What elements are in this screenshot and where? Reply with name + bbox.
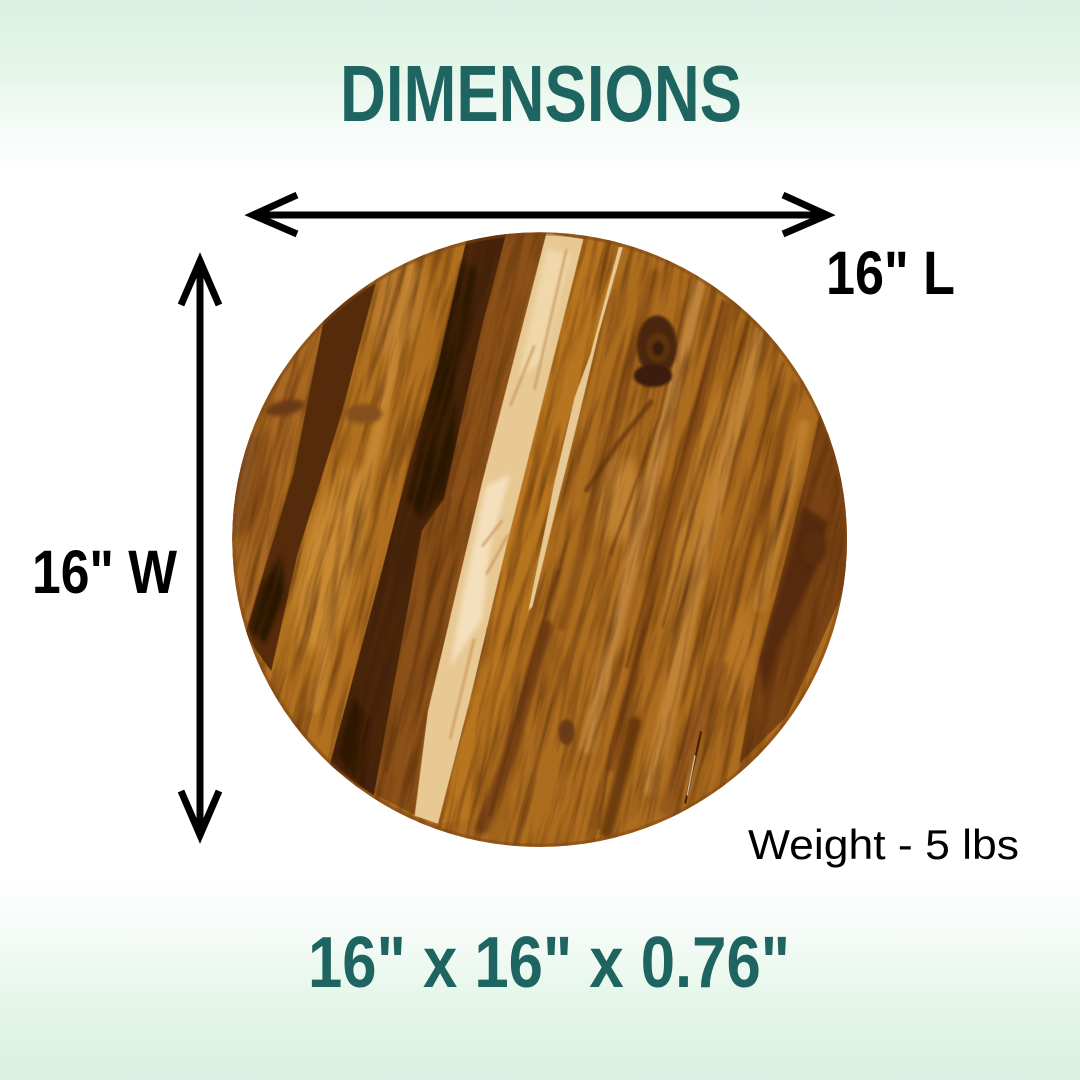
board rim: [234, 234, 845, 845]
wood grain texture: [234, 232, 846, 847]
thin light stripe: [528, 247, 623, 611]
grain streaks: [386, 277, 784, 828]
background gradient bottom: [0, 880, 1080, 1080]
knot: upper right: [634, 315, 677, 387]
label: length: 16" L: [826, 239, 955, 307]
brown band: [370, 233, 546, 816]
dark region on right edge: [739, 414, 855, 763]
overall dimensions: 16" x 16" x 0.76": [308, 923, 790, 1003]
dark stripe two: [329, 233, 506, 796]
broad tonal streaks: [233, 269, 804, 832]
weight note: Weight - 5 lbs: [748, 821, 1019, 868]
label: width: 16" W: [32, 538, 177, 606]
background gradient top: [0, 0, 1080, 175]
knot: bottom: [558, 719, 575, 745]
round teak cutting board: [232, 232, 847, 847]
knot: left: [264, 397, 826, 565]
left wood section: [232, 317, 328, 636]
arrow: length: [252, 195, 828, 234]
light wood stripe: [415, 233, 583, 824]
amber band beside light stripe: [438, 239, 623, 824]
board crack: [685, 731, 701, 804]
middle wood section: [374, 240, 470, 280]
dark stripe one: [245, 283, 376, 671]
title: DIMENSIONS: [340, 49, 742, 138]
arrow: width: [181, 261, 219, 835]
